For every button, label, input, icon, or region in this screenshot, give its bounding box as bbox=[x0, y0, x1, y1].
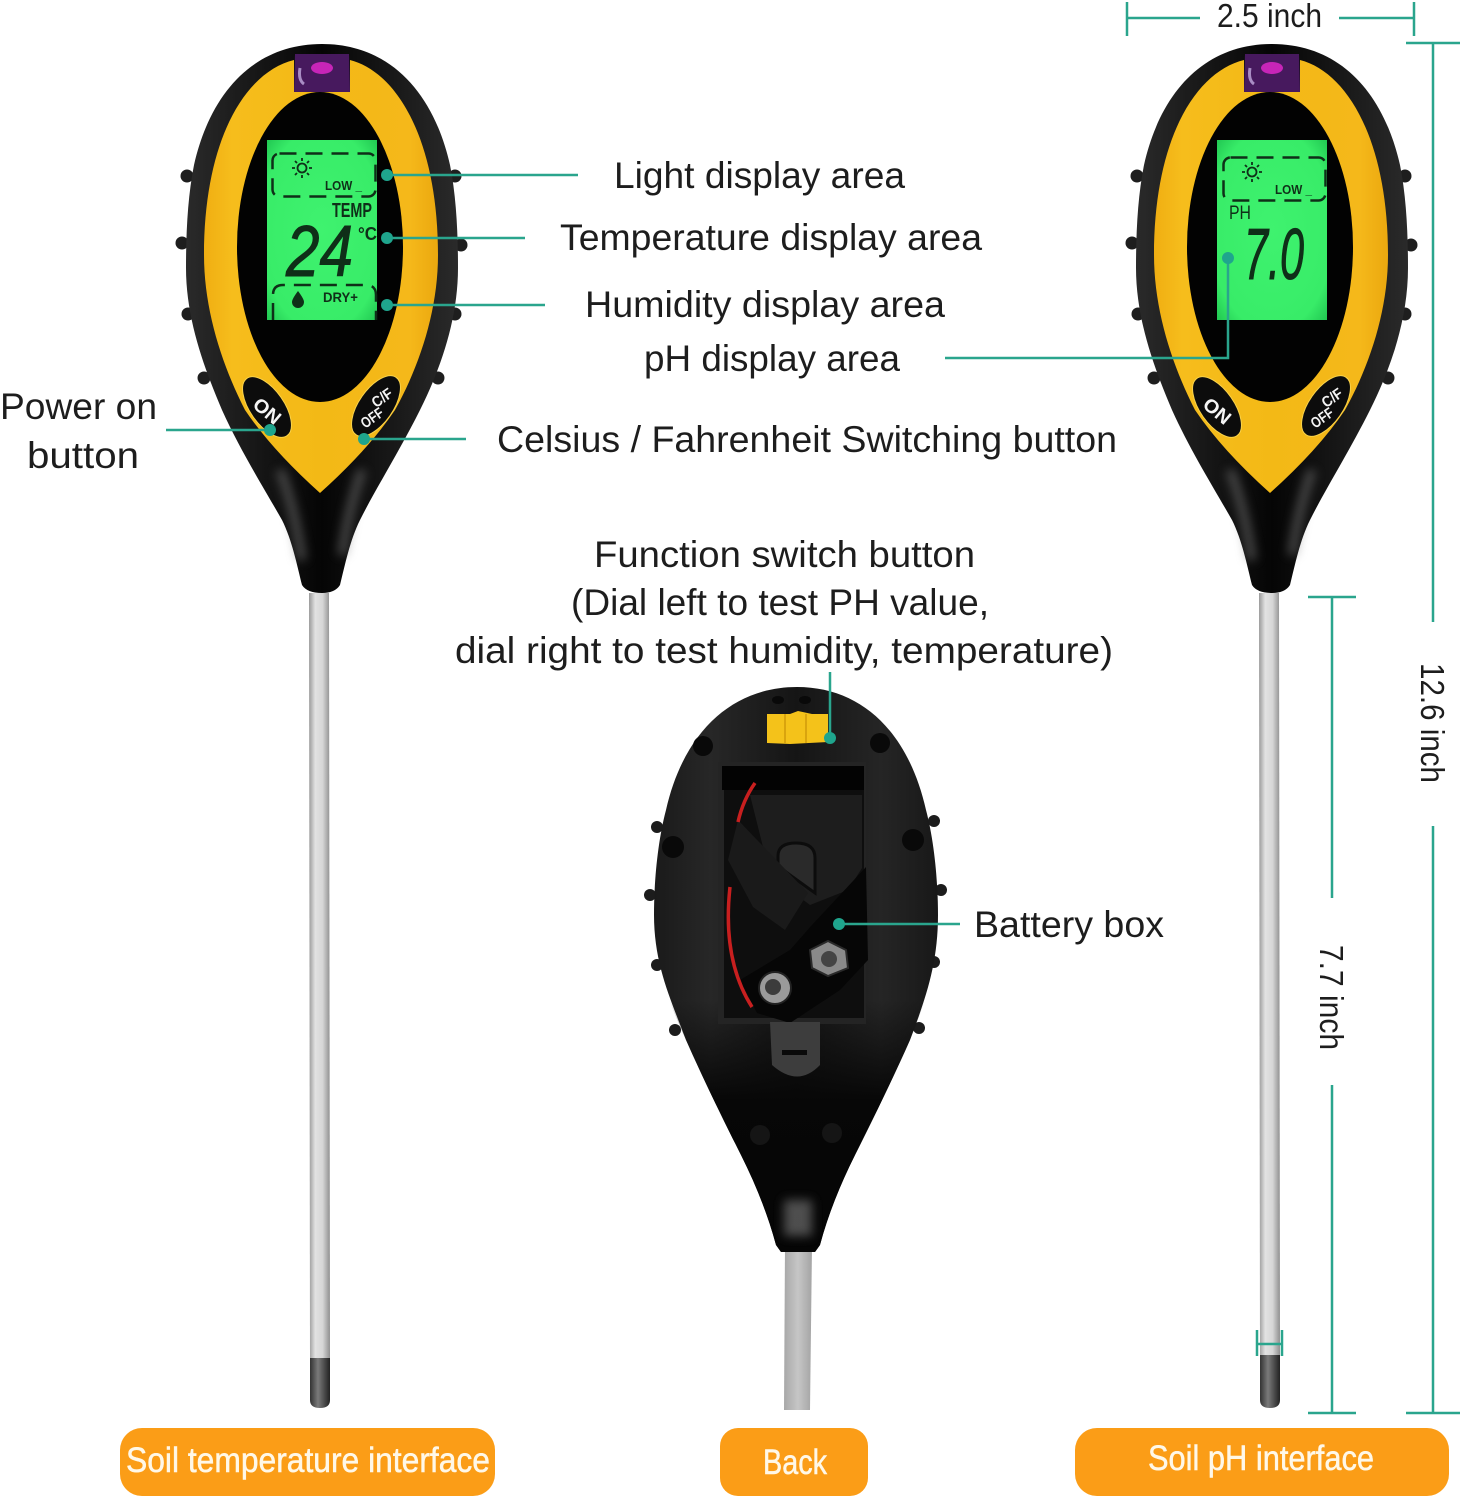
LCD screen bbox=[267, 140, 377, 320]
lower body shading bbox=[669, 1000, 925, 1252]
C/F off button: OFF bbox=[1308, 404, 1337, 432]
dimension: probe length 7.7 inch: 7.7 inch bbox=[1313, 945, 1350, 1050]
icon: sun bbox=[292, 158, 312, 178]
probe bbox=[784, 1245, 812, 1410]
LCD screen: °C bbox=[358, 224, 377, 244]
battery compartment bbox=[718, 762, 868, 1024]
back view of meter bbox=[644, 687, 947, 1410]
callout: power on button bbox=[0, 386, 276, 476]
meter body bbox=[1126, 44, 1418, 593]
callout: function switch button: Function switch button bbox=[594, 534, 975, 575]
left meter: soil temperature interface bbox=[176, 44, 468, 1408]
dimension: probe diameter tick bbox=[1257, 1330, 1282, 1356]
callout: light display area: Light display area bbox=[614, 155, 905, 196]
callout: battery box: Battery box bbox=[974, 904, 1165, 945]
label: soil temperature interface bbox=[120, 1428, 495, 1496]
purple sensor bbox=[294, 54, 350, 92]
LCD screen: DRY+ bbox=[323, 289, 358, 305]
battery snap screws bbox=[759, 941, 848, 1004]
label: soil temperature interface: Soil temperature interface bbox=[126, 1441, 490, 1480]
C/F off button: C/F bbox=[369, 385, 396, 412]
battery strap bbox=[728, 820, 808, 930]
LCD screen: LOW _ bbox=[325, 178, 363, 193]
label: back: Back bbox=[763, 1443, 827, 1482]
screw holes bbox=[662, 696, 924, 858]
meter body bbox=[176, 44, 468, 593]
back body bbox=[644, 687, 947, 1252]
callout: temperature display area: Temperature display area bbox=[560, 217, 982, 258]
LCD screen: 24 bbox=[285, 212, 353, 292]
callout: light display area bbox=[381, 155, 905, 196]
dimension: width 2.5 inch bbox=[1127, 0, 1414, 36]
probe bbox=[1259, 593, 1280, 1408]
label: soil pH interface bbox=[1075, 1428, 1449, 1496]
purple sensor bbox=[1244, 54, 1300, 92]
callout: temperature display area bbox=[381, 217, 982, 258]
on button: ON bbox=[248, 394, 285, 429]
C/F off button bbox=[1292, 368, 1360, 444]
label: soil pH interface: Soil pH interface bbox=[1148, 1439, 1374, 1478]
LCD screen: 7.0 bbox=[1244, 215, 1304, 295]
callout: humidity display area bbox=[381, 284, 945, 325]
yellow ring bbox=[204, 60, 438, 493]
callout: power on button: Power on bbox=[0, 386, 157, 427]
dimension: height 12.6 inch: 12.6 inch bbox=[1414, 663, 1451, 783]
yellow dial bbox=[767, 711, 828, 744]
callout: function switch button: (Dial left to test PH value, bbox=[571, 582, 989, 623]
C/F off button: C/F bbox=[1319, 385, 1346, 412]
callout: humidity display area: Humidity display area bbox=[585, 284, 945, 325]
icon: water drop bbox=[292, 291, 304, 308]
on button: ON bbox=[1198, 394, 1235, 429]
battery snap bbox=[740, 867, 868, 1023]
callout: power on button: button bbox=[27, 435, 139, 476]
LCD screen: LOW _ bbox=[1275, 182, 1313, 197]
LCD screen bbox=[1217, 140, 1327, 320]
neck highlight bbox=[784, 1200, 812, 1236]
callout: function switch button bbox=[455, 534, 1113, 744]
right meter: soil pH interface bbox=[1126, 44, 1418, 1408]
black display surround bbox=[1187, 92, 1353, 402]
label: back bbox=[720, 1428, 868, 1496]
LCD screen: PH bbox=[1229, 203, 1251, 224]
callout: battery box bbox=[833, 904, 1165, 945]
LCD screen: TEMP bbox=[332, 200, 372, 222]
dimension: probe length 7.7 inch bbox=[1308, 597, 1356, 1413]
probe bbox=[309, 593, 330, 1408]
C/F off button bbox=[342, 368, 410, 444]
dimension: height 12.6 inch bbox=[1406, 43, 1460, 1413]
callout: function switch button: dial right to test humidity, temperature) bbox=[455, 630, 1113, 671]
on button bbox=[1183, 369, 1251, 445]
callout: pH display area bbox=[644, 252, 1234, 379]
yellow ring bbox=[1154, 60, 1388, 493]
black display surround bbox=[237, 92, 403, 402]
red battery wires bbox=[728, 783, 755, 1007]
on button bbox=[233, 369, 301, 445]
battery slot bbox=[778, 843, 815, 893]
callout: pH display area: pH display area bbox=[644, 338, 900, 379]
icon: sun bbox=[1242, 162, 1262, 182]
callout: celsius / fahrenheit switching button: Celsius / Fahrenheit Switching button bbox=[497, 419, 1117, 460]
battery latch bbox=[770, 1022, 820, 1076]
C/F off button: OFF bbox=[358, 404, 387, 432]
